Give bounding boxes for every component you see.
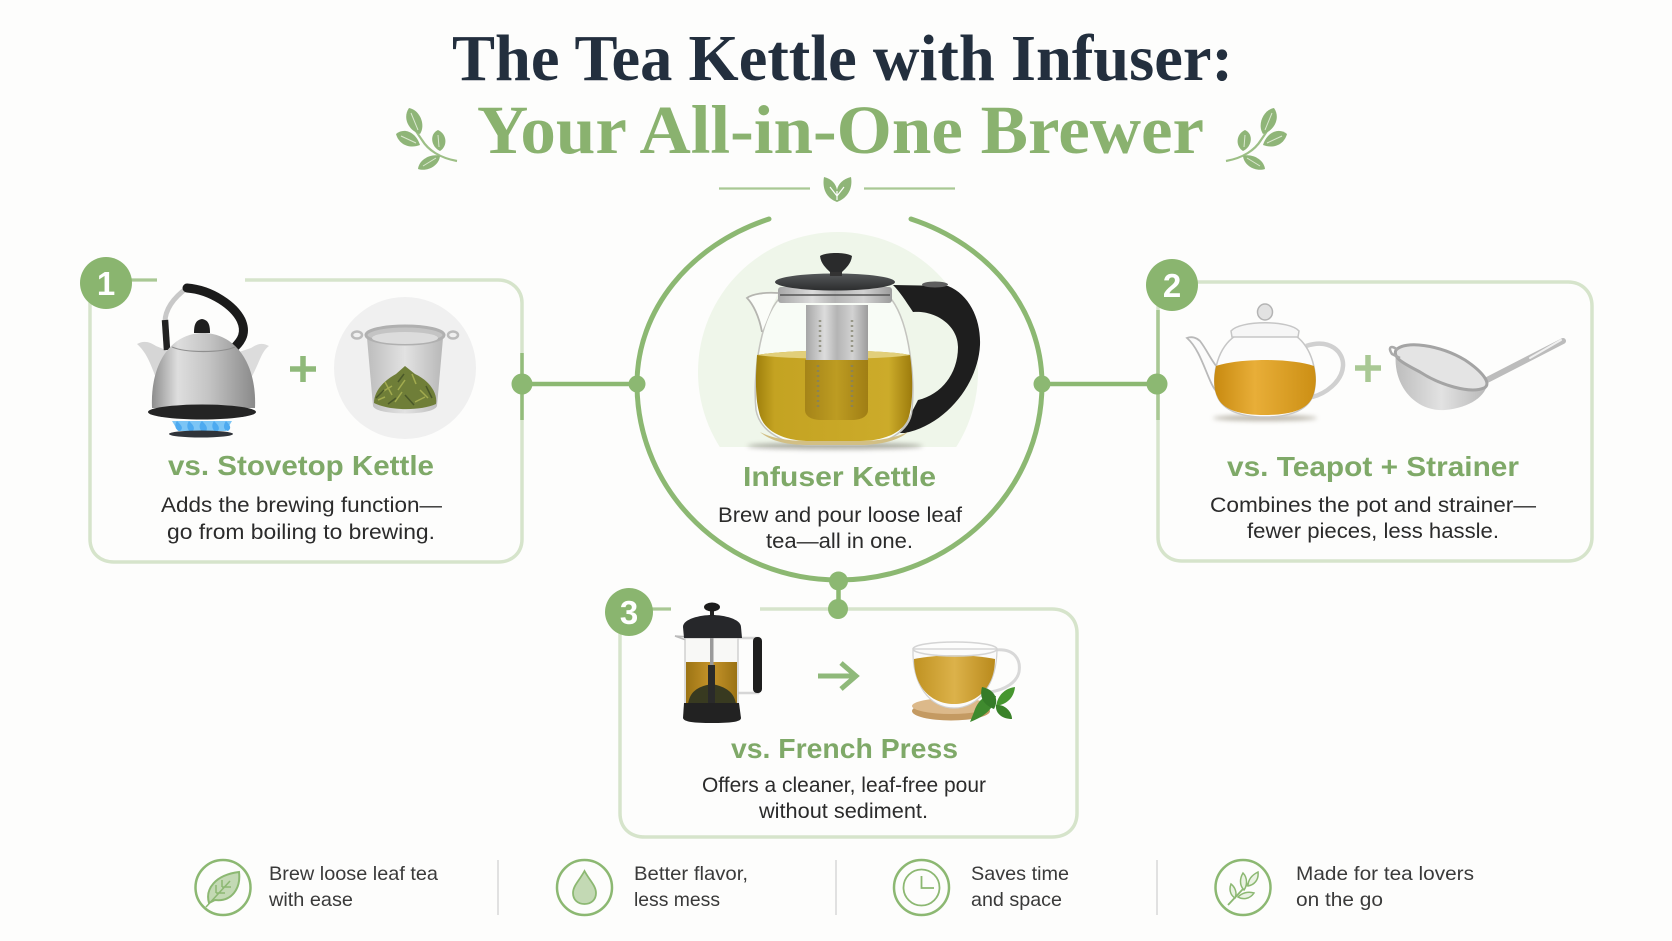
title: Your All-in-One Brewer xyxy=(477,92,1204,168)
description xyxy=(718,503,962,553)
benefit: better flavor: less mess xyxy=(634,889,720,911)
icon: leaf xyxy=(196,860,250,915)
description: Offers a cleaner, leaf-free pour xyxy=(702,773,986,797)
heading: vs. Teapot + Strainer xyxy=(1227,451,1519,482)
badge 3: 3 xyxy=(620,594,638,631)
stovetop kettle illustration xyxy=(137,288,269,438)
badge 2: 2 xyxy=(1163,267,1181,304)
hand strainer illustration xyxy=(1390,340,1563,410)
badge 3 xyxy=(605,588,653,636)
glass teapot illustration xyxy=(1187,304,1343,421)
badge 1: 1 xyxy=(97,265,115,302)
benefit: brew loose leaf xyxy=(196,860,438,915)
infuser kettle illustration xyxy=(747,253,980,450)
burner flames xyxy=(172,421,232,433)
badge 2 xyxy=(1146,259,1198,311)
description xyxy=(1210,493,1537,543)
icon: clock xyxy=(894,860,949,915)
description: tea—all in one. xyxy=(766,529,913,553)
benefit: brew loose leaf: Brew loose leaf tea xyxy=(269,863,438,885)
connector dot xyxy=(828,599,848,619)
mint leaves xyxy=(970,687,1015,722)
panel: stovetop kettle comparison xyxy=(80,257,532,562)
description xyxy=(161,493,443,544)
heading: vs. Stovetop Kettle xyxy=(168,450,434,481)
description: Brew and pour loose leaf xyxy=(718,503,962,527)
panel: teapot plus strainer comparison xyxy=(1146,259,1592,561)
panel: french press comparison xyxy=(605,588,1077,837)
benefit: better flavor xyxy=(557,860,748,915)
heading: vs. French Press xyxy=(731,733,958,764)
connector dot xyxy=(512,374,532,394)
description: go from boiling to brewing. xyxy=(167,520,435,544)
description: Adds the brewing function— xyxy=(161,493,443,517)
title: The Tea Kettle with Infuser: xyxy=(452,22,1233,95)
french press illustration xyxy=(675,602,762,723)
benefit: saves time: and space xyxy=(971,889,1062,911)
benefit: tea lovers: Made for tea lovers xyxy=(1296,863,1474,885)
panel: infuser kettle hero xyxy=(628,219,1050,590)
heading: Infuser Kettle xyxy=(743,461,936,492)
arrow xyxy=(818,663,856,689)
icon: right leaf sprig xyxy=(1226,108,1287,170)
description: without sediment. xyxy=(758,799,928,823)
benefit: brew loose leaf: with ease xyxy=(268,889,353,911)
title xyxy=(452,22,1233,168)
icon: drop xyxy=(557,860,612,915)
mesh strainer with tea leaves xyxy=(334,297,476,439)
benefit: tea lovers: on the go xyxy=(1296,889,1383,911)
description: Combines the pot and strainer— xyxy=(1210,493,1537,517)
tea cup illustration xyxy=(912,642,1019,722)
description xyxy=(702,773,986,823)
plus sign xyxy=(1355,355,1381,382)
icon: sprig xyxy=(1216,860,1270,915)
badge 1 xyxy=(80,257,132,309)
title divider with leaf xyxy=(719,177,955,202)
plus sign xyxy=(290,356,316,382)
ring xyxy=(637,219,1042,580)
pale disc xyxy=(698,232,978,447)
footer benefits row xyxy=(196,860,1474,915)
ring dots xyxy=(628,376,1050,590)
connector dot xyxy=(1146,374,1168,394)
icon: left leaf sprig xyxy=(396,108,457,170)
description: fewer pieces, less hassle. xyxy=(1247,519,1499,543)
benefit: saves time: Saves time xyxy=(971,863,1069,885)
benefit: saves time xyxy=(894,860,1069,915)
benefit: better flavor: Better flavor, xyxy=(634,863,748,885)
benefit: tea lovers xyxy=(1216,860,1474,915)
connectors xyxy=(522,384,1157,609)
